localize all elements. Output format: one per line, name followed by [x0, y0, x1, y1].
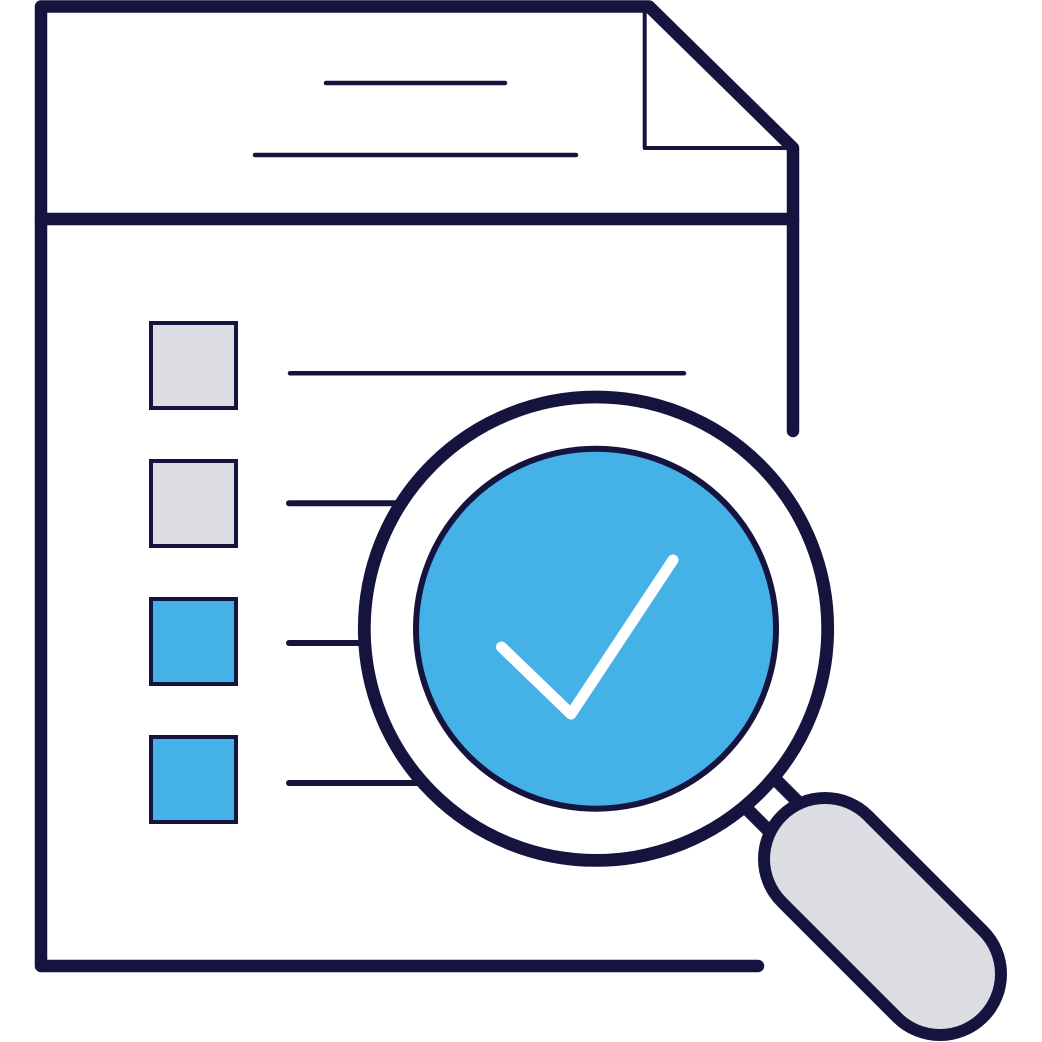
checklist item 2: [151, 461, 400, 546]
magnifying glass: [364, 397, 940, 974]
page fold: [645, 8, 790, 148]
header text lines: [255, 83, 576, 155]
handle: [825, 859, 940, 974]
checklist item 3: [151, 599, 365, 684]
checklist item 4: [151, 737, 420, 822]
checklist item 1: [151, 323, 684, 408]
check mark: [502, 560, 673, 714]
handle connector: [740, 772, 810, 834]
document outline: [41, 6, 793, 966]
lens: [416, 449, 776, 809]
lens frame: [364, 397, 828, 860]
